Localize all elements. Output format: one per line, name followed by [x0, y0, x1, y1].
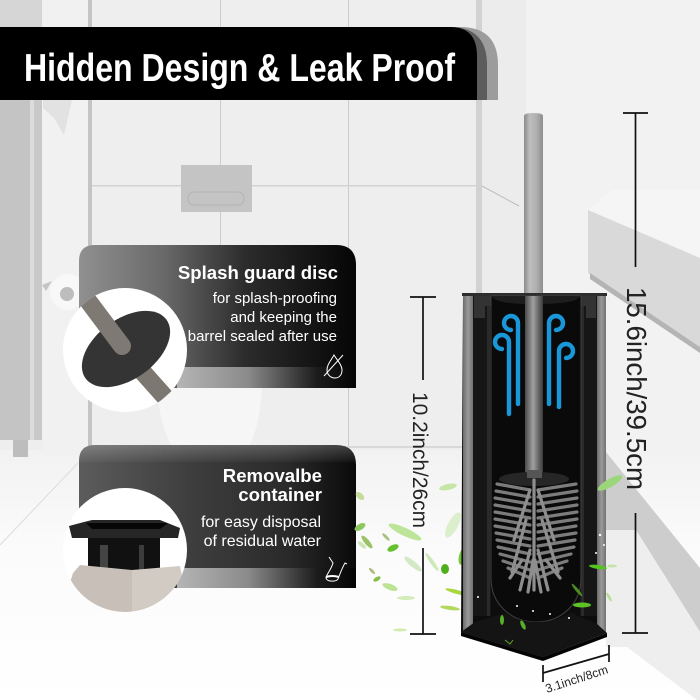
splash disc inside — [499, 472, 569, 486]
text: container description: of residual water — [204, 533, 322, 550]
heading: removable container: container — [238, 484, 322, 505]
leaves — [353, 482, 469, 632]
dimension: total height 15.6inch/39.5cm: 15.6inch/39.5cm — [621, 287, 652, 490]
floor light bands — [606, 452, 700, 700]
heading: removable container: Removalbe — [223, 465, 322, 486]
flush plate — [181, 165, 252, 212]
dimension: width 3.1inch/8cm — [543, 645, 610, 696]
dimension: width 3.1inch/8cm: 3.1inch/8cm — [544, 662, 610, 696]
product: cutaway holder — [461, 293, 624, 661]
text: splash guard description: for splash-proofing — [213, 290, 337, 307]
sparkles — [477, 534, 605, 619]
panel: removable container — [60, 445, 356, 615]
text: splash guard description: and keeping the — [230, 309, 337, 326]
toilet paper holder — [42, 274, 86, 310]
title banner — [0, 27, 498, 100]
brush shaft — [525, 296, 543, 474]
towel — [43, 100, 72, 135]
title text: Hidden Design & Leak Proof — [24, 47, 456, 90]
dimension: container height 10.2inch/26cm: 10.2inch/26cm — [408, 392, 431, 528]
green leaves on holder — [500, 473, 624, 644]
circle image: container — [69, 488, 187, 612]
heading: splash guard disc: Splash guard disc — [178, 262, 338, 283]
icon: container with water — [326, 557, 347, 581]
dimension: total height 15.6inch/39.5cm — [621, 113, 652, 633]
dimension: container height 10.2inch/26cm — [408, 297, 436, 634]
toilet bowl — [157, 388, 262, 458]
panel: splash guard disc — [63, 245, 356, 412]
circle image: disc on rod — [63, 288, 187, 412]
air flow swirls — [495, 316, 573, 414]
radiator — [0, 0, 42, 457]
brush handle — [524, 113, 543, 295]
text: splash guard description: barrel sealed after use — [188, 328, 337, 345]
text: container description: for easy disposal — [201, 514, 321, 531]
icon: crossed water drop — [324, 355, 343, 378]
brush head bristles — [495, 480, 577, 592]
counter shelf — [588, 190, 700, 353]
